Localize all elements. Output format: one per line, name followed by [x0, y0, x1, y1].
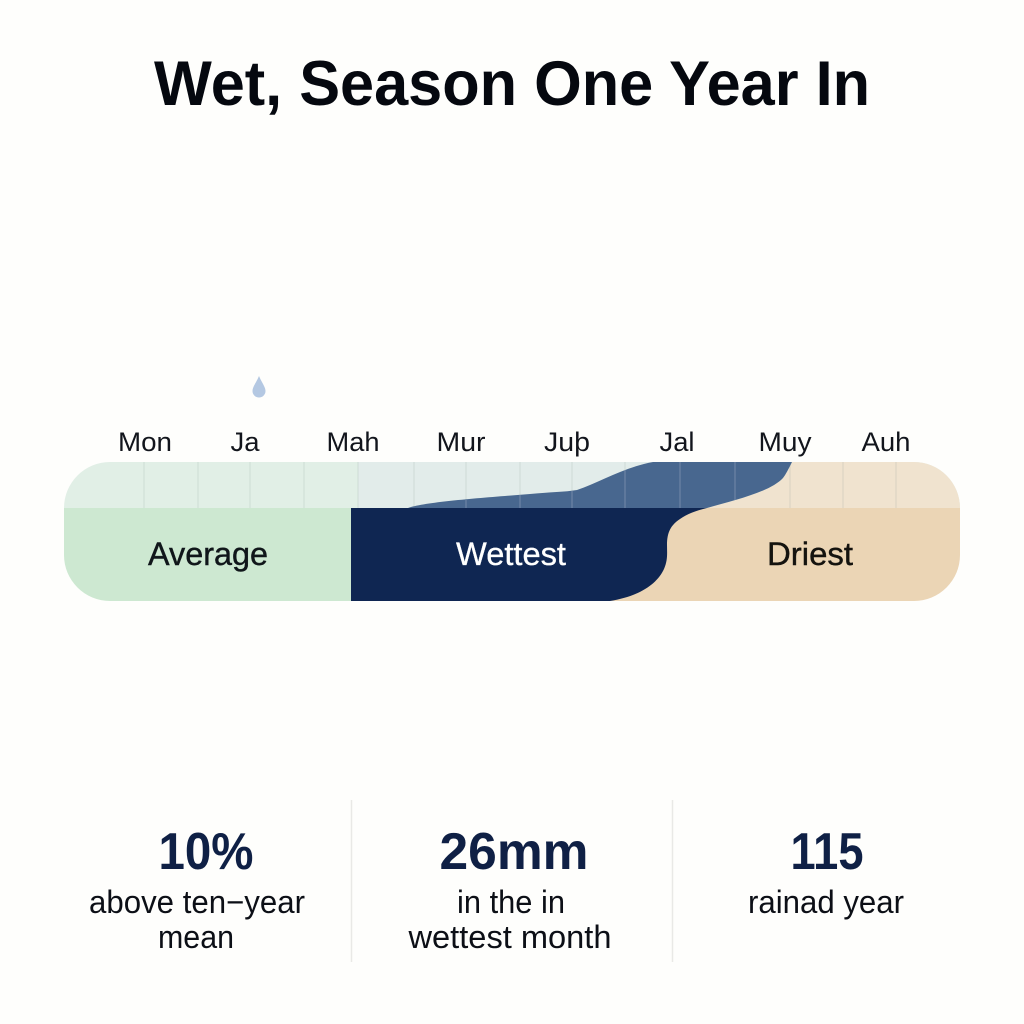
- divider: [350, 800, 352, 962]
- icon: water drop: [252, 376, 266, 398]
- lower band: driest segment: [600, 508, 960, 601]
- lower band: wettest segment: [351, 508, 707, 601]
- month labels: Mon: [118, 427, 172, 457]
- rainfall season bar: [64, 462, 960, 601]
- month labels: Auh: [862, 427, 910, 457]
- stat: above mean: above ten−year: [89, 884, 305, 920]
- stat: above mean: [89, 823, 305, 955]
- month labels: Ja: [230, 427, 260, 457]
- stat: rainy year: rainad year: [748, 884, 904, 920]
- title: Wet, Season One Year In: [154, 49, 870, 119]
- upper band: rainfall wave: [408, 462, 792, 508]
- stat: wettest month: 26mm: [440, 823, 588, 881]
- stat: wettest month: [407, 823, 612, 955]
- month labels: Jal: [660, 427, 694, 457]
- upper band: dry tint: [707, 462, 960, 508]
- segment label: wettest: Wettest: [456, 536, 566, 572]
- lower band: average segment: [64, 508, 351, 601]
- segment label: average: Average: [148, 536, 268, 572]
- divider: [672, 800, 674, 962]
- month labels: Juþ: [544, 427, 590, 457]
- segment label: driest: Driest: [767, 536, 853, 572]
- stat: rainy year: 115: [790, 823, 864, 881]
- stat: rainy year: [748, 823, 904, 920]
- upper band: light background: [64, 462, 792, 508]
- month labels: Mah: [326, 427, 380, 457]
- stat: above mean: 10%: [158, 823, 254, 881]
- month labels: Mur: [436, 427, 486, 457]
- month labels: [118, 427, 910, 457]
- stat: above mean: mean: [158, 919, 234, 955]
- stat: wettest month: wettest month: [407, 919, 612, 955]
- month labels: Muy: [758, 427, 812, 457]
- stat: wettest month: in the in: [457, 884, 565, 920]
